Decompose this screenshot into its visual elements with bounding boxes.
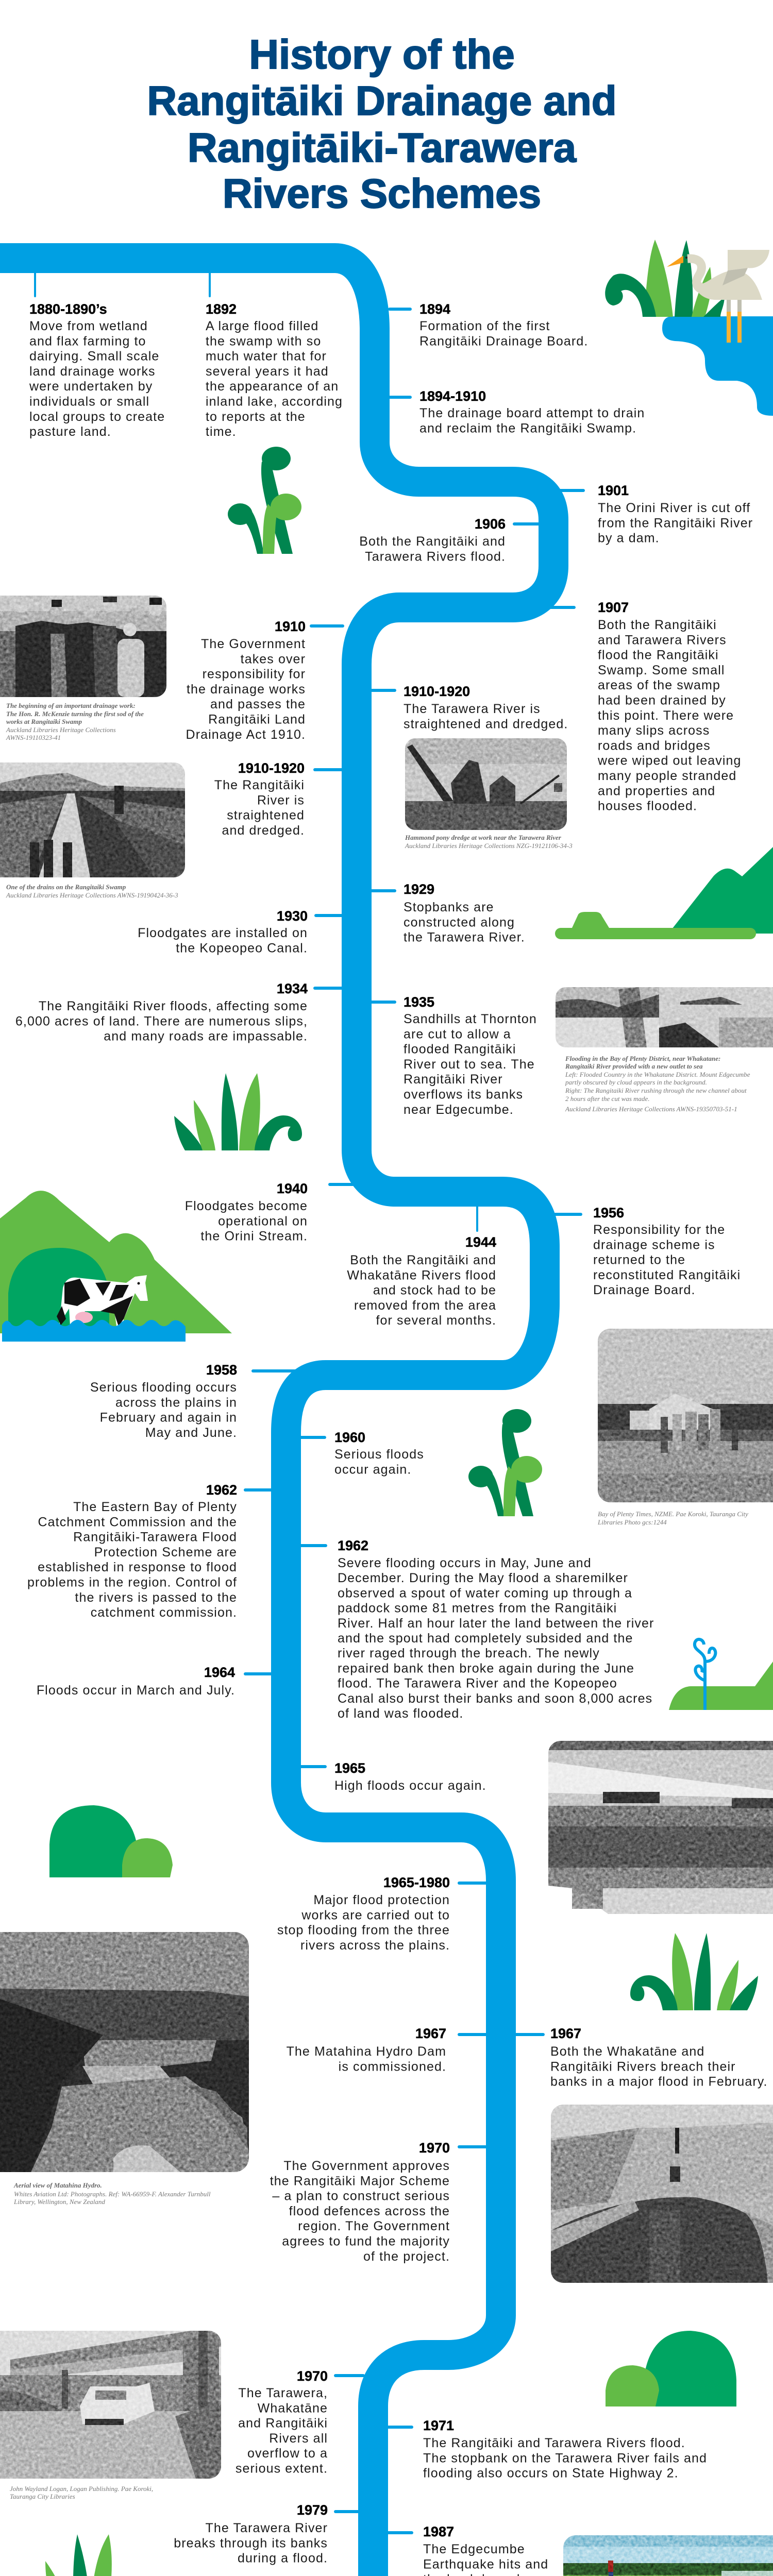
entry: 1935: overflows its banks <box>404 1087 523 1101</box>
entry: 1987: Earthquake hits and <box>423 2557 548 2571</box>
photo: drain on Rangitaiki Swamp with caption: Auckland Libraries Heritage Collections AWNS-19190424-36-3 <box>6 891 178 899</box>
photo: first sod ceremony with caption <box>0 596 166 741</box>
entry: 1910: the drainage works <box>187 682 306 697</box>
entry: 1935: are cut to allow a <box>404 1027 511 1041</box>
entry: 1935: flooded Rangitāiki <box>404 1042 516 1057</box>
photo: Hammond pony dredge with caption: Auckland Libraries Heritage Collections NZG-19121106-34-3 <box>405 842 573 850</box>
entry: 1880-1890s: were undertaken by <box>29 379 153 394</box>
entry: 1970 major scheme: of the project. <box>363 2249 450 2264</box>
entry: 1944: Whakatāne Rivers flood <box>347 1268 496 1282</box>
entry: 1956: Drainage Board. <box>593 1283 696 1297</box>
photo: first sod ceremony with caption: The Hon. R. McKenzie turning the first sod of the <box>6 710 144 718</box>
entry: 1965-1980: 1965-1980 <box>383 1875 450 1890</box>
photo: school flood with caption <box>597 1329 773 1526</box>
entry: 1910: and passes the <box>210 697 306 711</box>
entry: 1907: had been drained by <box>598 693 726 708</box>
entry: 1967 right <box>516 2026 768 2089</box>
icon: bushes <box>606 2331 736 2406</box>
entry: 1979: 1979 <box>297 2502 328 2518</box>
entry: 1962 right: paddock some 81 metres from the Rangitāiki <box>338 1601 617 1616</box>
entry: 1956: Responsibility for the <box>593 1223 725 1237</box>
entry: 1894-1910: 1894-1910 <box>419 388 486 404</box>
title: Rangitāiki-Tarawera <box>188 125 577 171</box>
photo: first sod ceremony with caption: The beginning of an important drainage work: <box>6 702 136 709</box>
photo: 1935 flooding pair with caption: Flooding in the Bay of Plenty District, near Whakatane: <box>565 1055 720 1062</box>
icon: fern <box>468 1409 542 1516</box>
entry: 1970 major scheme: 1970 <box>419 2140 450 2156</box>
entry: 1960: occur again. <box>334 1462 411 1477</box>
entry: 1979: during a flood. <box>238 2551 328 2566</box>
entry: 1880-1890s: Move from wetland <box>29 319 148 333</box>
entry: 1965-1980: stop flooding from the three <box>277 1923 450 1938</box>
entry: 1894-1910 <box>390 388 645 435</box>
entry: 1894-1910: The drainage board attempt to drain <box>419 406 645 420</box>
entry: 1965: High floods occur again. <box>334 1778 486 1793</box>
entry: 1944: Both the Rangitāiki and <box>350 1253 496 1267</box>
entry: 1892: 1892 <box>206 301 237 317</box>
entry: 1956 <box>555 1205 741 1297</box>
entry: 1962 right: observed a spout of water coming up through a <box>338 1586 632 1600</box>
entry: 1967 left: is commissioned. <box>339 2059 446 2074</box>
entry: 1907: houses flooded. <box>598 799 697 814</box>
entry: 1907: roads and bridges <box>598 738 711 753</box>
entry: 1971: flooding also occurs on State Highway 2. <box>423 2466 679 2481</box>
entry: 1970 rivers overflow: serious extent. <box>236 2462 328 2476</box>
entry: 1979: breaks through its banks <box>174 2536 328 2550</box>
entry: 1962 left: The Eastern Bay of Plenty <box>73 1500 237 1514</box>
entry: 1910-1920 left: The Rangitāiki <box>214 778 305 792</box>
entry: 1958: Serious flooding occurs <box>90 1380 237 1395</box>
entry: 1979 <box>174 2502 358 2566</box>
photo: 1935 flooding pair with caption: partly obscured by cloud appears in the background. <box>565 1078 707 1086</box>
entry: 1965-1980: Major flood protection <box>313 1893 450 1907</box>
entry: 1962 right: Canal also burst their banks and soon 8,000 acres <box>338 1691 652 1706</box>
entry: 1970 rivers overflow: and Rangitāiki <box>238 2416 328 2431</box>
entry: 1906 <box>359 516 539 564</box>
entry: 1962 right: river raged through the breach. The newly <box>338 1646 600 1660</box>
entry: 1910: Rangitāiki Land <box>208 712 306 726</box>
photo: Matahina Hydro aerial with caption: Library, Wellington, New Zealand <box>13 2198 105 2206</box>
entry: 1958: 1958 <box>206 1362 237 1378</box>
entry: 1901: The Orini River is cut off <box>598 501 750 515</box>
entry: 1907: Swamp. Some small <box>598 663 725 677</box>
entry: 1892: inland lake, according <box>206 395 343 409</box>
entry: 1892: several years it had <box>206 364 329 379</box>
entry: 1971: The Rangitāiki and Tarawera Rivers flood. <box>423 2436 685 2450</box>
entry: 1987: The Edgecumbe <box>423 2542 525 2556</box>
entry: 1934: and many roads are impassable. <box>104 1029 308 1044</box>
entry: 1880-1890s: local groups to create <box>29 410 165 424</box>
entry: 1935: River out to sea. The <box>404 1057 535 1072</box>
entry: 1930 <box>138 908 343 955</box>
entry: 1910: 1910 <box>275 619 306 634</box>
entry: 1880-1890s: individuals or small <box>29 395 149 409</box>
entry: 1962 right: of land was flooded. <box>338 1706 463 1721</box>
icon: grass clump <box>174 1073 302 1150</box>
photo: 1935 flooding pair with caption: 2 hours after the cut was made. <box>565 1095 650 1103</box>
entry: 1906: 1906 <box>475 516 506 532</box>
photo: Land Rover in floodwater with caption: John Wayland Logan, Logan Publishing. Pae Koroki, <box>10 2485 153 2493</box>
entry: 1965-1980: rivers across the plains. <box>300 1938 450 1953</box>
illustration: blue water plant on green bank <box>669 1639 773 1710</box>
entry: 1965: 1965 <box>334 1760 365 1776</box>
entry: 1962 left: problems in the region. Control of <box>27 1575 237 1590</box>
photo: 1967 flood aerial <box>551 2105 773 2283</box>
entry: 1892: the swamp with so <box>206 334 321 348</box>
photo: Matahina Hydro aerial with caption: Aerial view of Matahina Hydro. <box>13 2181 102 2189</box>
entry: 1910-1920 right <box>372 684 568 731</box>
title: Rangitāiki Drainage and <box>147 78 617 124</box>
icon: fern <box>228 447 301 554</box>
entry: 1910: takes over <box>241 652 306 666</box>
entry: 1962 left: Catchment Commission and the <box>38 1515 237 1529</box>
entry: 1960: 1960 <box>334 1430 365 1445</box>
photo: 1935 flooding pair with caption: Left: Flooded Country in the Whakatane District. Mount Edgecumbe <box>565 1071 750 1078</box>
icon: grass clump <box>26 2534 154 2576</box>
entry: 1892: much water that for <box>206 349 327 364</box>
entry: 1987 <box>388 2524 548 2576</box>
entry: 1894-1910: and reclaim the Rangitāiki Swamp. <box>419 421 636 435</box>
entry: 1967 right: Both the Whakatāne and <box>550 2044 704 2059</box>
entry: 1929: constructed along <box>404 915 515 929</box>
entry: 1970 major scheme: the Rangitāiki Major Scheme <box>270 2174 450 2188</box>
entry: 1962 right: December. During the May flood a sharemilker <box>338 1571 628 1585</box>
entry: 1967 left: 1967 <box>415 2026 446 2041</box>
entry: 1906: Tarawera Rivers flood. <box>365 549 506 564</box>
entry: 1970 rivers overflow: Rivers all <box>269 2431 328 2446</box>
entry: 1930: Floodgates are installed on <box>138 926 308 940</box>
entry: 1956: drainage scheme is <box>593 1238 715 1252</box>
entry: 1907: this point. There were <box>598 708 734 723</box>
entry: 1971 <box>388 2418 707 2481</box>
entry: 1940: 1940 <box>277 1181 308 1196</box>
entry: 1929: Stopbanks are <box>404 900 494 914</box>
entry: 1964: Floods occur in March and July. <box>37 1683 235 1698</box>
entry: 1929 <box>372 882 525 945</box>
entry: 1892: time. <box>206 425 237 439</box>
entry: 1901 <box>557 483 753 546</box>
entry: 1907: were wiped out leaving <box>597 754 742 768</box>
entry: 1901: 1901 <box>598 483 629 498</box>
entry: 1962 right: Severe flooding occurs in May, June and <box>338 1556 592 1570</box>
entry: 1910 <box>186 619 343 742</box>
icon: bushes <box>49 1805 173 1877</box>
entry: 1962 left: Protection Scheme are <box>94 1545 237 1560</box>
photo: first sod ceremony with caption: AWNS-19110323-41 <box>6 734 61 741</box>
entry: 1964 <box>37 1665 271 1698</box>
entry: 1880-1890s: land drainage works <box>29 364 156 379</box>
entry: 1962 right: flood. The Tarawera River and the Kopeopeo <box>338 1676 617 1691</box>
entry: 1940: the Orini Stream. <box>200 1229 308 1244</box>
title <box>147 31 617 216</box>
photo: first sod ceremony with caption: Auckland Libraries Heritage Collections <box>6 726 116 734</box>
entry: 1962 right: and the spout had completely subsided and the <box>338 1631 633 1646</box>
entry: 1967 left <box>287 2026 486 2074</box>
entry: 1970 rivers overflow: 1970 <box>297 2368 328 2384</box>
entry: 1944: removed from the area <box>354 1298 496 1313</box>
entry: 1907: and properties and <box>598 784 715 798</box>
entry: 1940 <box>185 1181 356 1244</box>
entry: 1910-1920 left: and dredged. <box>222 823 305 838</box>
photo: 1935 flooding pair with caption: Right: The Rangitaiki River rushing through the new channel about <box>565 1087 747 1094</box>
entry: 1907: many people stranded <box>598 769 736 783</box>
entry: 1880-1890s: 1880-1890’s <box>29 301 107 317</box>
entry: 1934: The Rangitāiki River floods, affecting some <box>39 999 308 1013</box>
entry: 1958 <box>90 1362 296 1440</box>
photo: 1935 flooding pair with caption: Rangitaiki River provided with a new outlet to sea <box>565 1062 703 1070</box>
entry: 1910-1920 left: 1910-1920 <box>238 760 305 776</box>
entry: 1930: 1930 <box>277 908 308 924</box>
entry: 1967 right: 1967 <box>550 2026 581 2041</box>
photo: Land Rover in floodwater with caption <box>0 2329 221 2500</box>
photo: Hammond pony dredge with caption <box>405 738 573 850</box>
entry: 1971: 1971 <box>423 2418 454 2433</box>
photo: earthquake fault rupture with caption <box>563 2535 773 2576</box>
entry: 1967 right: Rangitāiki Rivers breach their <box>550 2059 736 2074</box>
photo: drain on Rangitaiki Swamp with caption <box>0 762 185 899</box>
entry: 1970 major scheme: The Government approves <box>283 2159 450 2173</box>
entry: 1880-1890s: and flax farming to <box>29 334 146 348</box>
entry: 1944: for several months. <box>376 1313 496 1328</box>
entry: 1956: 1956 <box>593 1205 624 1221</box>
entry: 1962 left: the rivers is passed to the <box>75 1590 237 1605</box>
entry: 1880-1890s: dairying. Small scale <box>29 349 159 364</box>
entry: 1965 <box>301 1760 486 1793</box>
entry: 1935: Sandhills at Thornton <box>404 1012 537 1026</box>
entry: 1910: The Government <box>201 637 306 651</box>
entry: 1910-1920 right: The Tarawera River is <box>404 702 541 716</box>
photo: 1935 flooding pair with caption <box>556 987 773 1113</box>
title: Rivers Schemes <box>223 171 541 216</box>
photo: 1935 flooding pair with caption: Auckland Libraries Heritage Collections AWNS-19350703-51-1 <box>565 1105 737 1113</box>
entry: 1934 <box>15 981 343 1044</box>
entry: 1894: Formation of the first <box>419 319 550 333</box>
entry: 1971: The stopbank on the Tarawera River fails and <box>423 2451 707 2465</box>
entry: 1940: operational on <box>218 1214 308 1228</box>
entry: 1962 right <box>301 1538 654 1721</box>
entry: 1956: returned to the <box>593 1253 685 1267</box>
entry: 1970 major scheme: – a plan to construct serious <box>272 2189 450 2204</box>
entry: 1910-1920 left <box>214 760 343 838</box>
entry: 1901: from the Rangitāiki River <box>598 516 753 530</box>
entry: 1910: Drainage Act 1910. <box>186 727 306 742</box>
entry: 1944: 1944 <box>465 1234 496 1250</box>
entry: 1929: the Tarawera River. <box>404 930 525 945</box>
entry: 1962 left: catchment commission. <box>91 1605 237 1620</box>
entry: 1930: the Kopeopeo Canal. <box>176 941 308 955</box>
entry: 1892: A large flood filled <box>206 319 318 333</box>
entry: 1910-1920 right: straightened and dredged. <box>404 717 568 731</box>
entry: 1962 left: established in response to flood <box>38 1560 237 1574</box>
entry: 1894 <box>390 301 588 348</box>
entry: 1907: Both the Rangitāiki <box>598 618 717 632</box>
entry: 1970 rivers overflow: The Tarawera, <box>238 2386 328 2400</box>
entry: 1970 major scheme: agrees to fund the majority <box>282 2234 450 2248</box>
entry: 1894: 1894 <box>419 301 450 317</box>
illustration: heron and reeds, top right <box>605 240 773 416</box>
entry: 1907: areas of the swamp <box>598 678 720 692</box>
entry: 1910-1920 left: straightened <box>227 808 305 823</box>
entry: 1935 <box>372 994 537 1117</box>
photo: school flood with caption: Libraries Photo gcs:1244 <box>597 1518 667 1526</box>
entry: 1907 <box>550 600 742 814</box>
entry: 1910-1920 right: 1910-1920 <box>404 684 470 699</box>
river timeline <box>0 258 553 2576</box>
entry: 1970 rivers overflow: Whakatāne <box>258 2401 328 2415</box>
entry: 1960: Serious floods <box>334 1447 424 1462</box>
entry: 1935: Rangitāiki River <box>404 1072 503 1087</box>
entry: 1970 rivers overflow: overflow to a <box>247 2446 328 2461</box>
icon: grass clump <box>630 1933 758 2010</box>
entry: 1894: Rangitāiki Drainage Board. <box>419 334 588 348</box>
entry: 1906: Both the Rangitāiki and <box>359 534 506 549</box>
photo: first sod ceremony with caption: works at Rangitaiki Swamp <box>6 718 82 725</box>
entry: 1929: 1929 <box>404 882 434 897</box>
entry: 1962 left: Rangitāiki-Tarawera Flood <box>73 1530 237 1545</box>
photo: Matahina Hydro aerial with caption: Whites Aviation Ltd: Photographs. Ref: WA-66959-F. Alexander Turnbull <box>14 2190 211 2198</box>
entry: 1964: 1964 <box>204 1665 235 1680</box>
entry: 1958: February and again in <box>100 1411 237 1425</box>
entry: 1880-1890s: pasture land. <box>29 425 111 439</box>
entry: 1987: 1987 <box>423 2524 454 2539</box>
photo: drain on Rangitaiki Swamp with caption: One of the drains on the Rangitaiki Swamp <box>6 883 126 891</box>
entry: 1944 <box>347 1207 496 1328</box>
entry: 1901: by a dam. <box>598 531 660 546</box>
photo: 1960s aerial of flooded town <box>548 1741 773 1914</box>
entry: 1935: 1935 <box>404 994 434 1010</box>
entry: 1907: flood the Rangitāiki <box>598 648 719 663</box>
entry: 1910-1920 left: River is <box>257 793 305 807</box>
entry: 1962 right: repaired bank then broke again during the June <box>338 1661 634 1675</box>
entry: 1880-1890s <box>29 273 165 439</box>
entry: 1962 right: 1962 <box>338 1538 368 1553</box>
entry: 1944: and stock had to be <box>373 1283 496 1298</box>
illustration: cow in hills <box>0 1191 232 1342</box>
title: History of the <box>249 31 515 77</box>
illustration: hills and stopbank <box>555 847 773 939</box>
entry: 1967 right: banks in a major flood in February. <box>550 2075 768 2089</box>
entry: 1970 major scheme <box>270 2140 486 2264</box>
entry: 1910: responsibility for <box>203 667 306 682</box>
entry: 1965-1980: works are carried out to <box>301 1908 450 1922</box>
entry: 1960 <box>301 1430 424 1477</box>
entry: 1967 left: The Matahina Hydro Dam <box>287 2044 446 2059</box>
entry: 1965-1980 <box>277 1875 486 1953</box>
entry: 1892 <box>206 273 343 439</box>
entry: 1962 right: River. Half an hour later the land between the river <box>338 1616 654 1631</box>
entry: 1907: many slips across <box>598 723 710 738</box>
entry: 1958: across the plains in <box>115 1395 237 1410</box>
entry: 1892: the appearance of an <box>206 379 339 394</box>
entry: 1934: 6,000 acres of land. There are numerous slips, <box>15 1014 308 1028</box>
entry: 1970 rivers overflow <box>236 2368 363 2476</box>
entry: 1979: The Tarawera River <box>206 2521 328 2535</box>
photo: Land Rover in floodwater with caption: Tauranga City Libraries <box>10 2493 75 2500</box>
entry: 1907: 1907 <box>598 600 629 615</box>
photo: Matahina Hydro aerial with caption <box>0 1932 253 2206</box>
entry: 1934: 1934 <box>277 981 308 996</box>
entry: 1970 major scheme: flood defences across the <box>289 2204 450 2218</box>
photo: school flood with caption: Bay of Plenty Times, NZME. Pae Koroki, Tauranga City <box>598 1510 748 1518</box>
entry: 1958: May and June. <box>145 1426 237 1440</box>
entry: 1962 left <box>27 1482 271 1620</box>
photo: Hammond pony dredge with caption: Hammond pony dredge at work near the Tarawera River <box>405 834 562 841</box>
entry: 1940: Floodgates become <box>185 1199 308 1213</box>
entry: 1956: reconstituted Rangitāiki <box>593 1268 741 1282</box>
entry: 1935: near Edgecumbe. <box>404 1103 514 1117</box>
entry: 1907: and Tarawera Rivers <box>598 633 727 647</box>
entry: 1892: to reports at the <box>206 410 306 424</box>
entry: 1962 left: 1962 <box>206 1482 237 1498</box>
entry: 1970 major scheme: region. The Government <box>298 2219 450 2233</box>
